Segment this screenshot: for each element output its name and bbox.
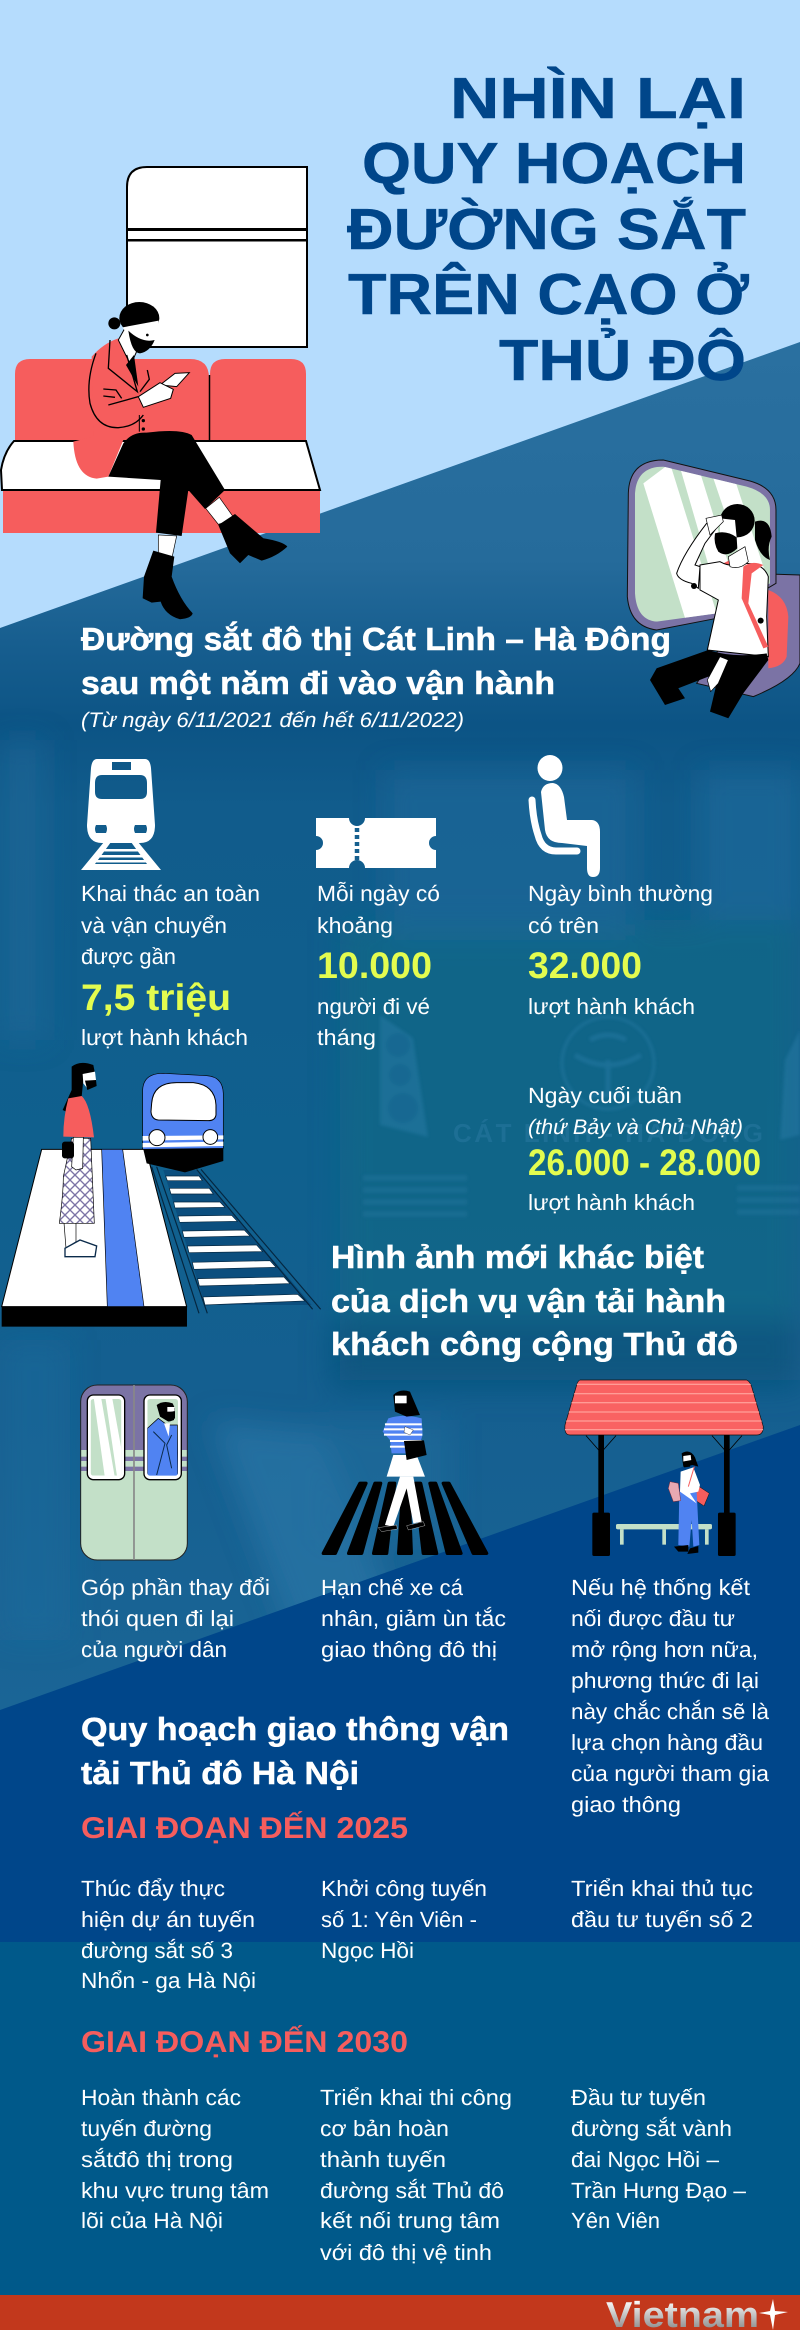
stat: 10.000: 10.000 (317, 945, 432, 986)
text: 2030 item 3 (571, 2085, 747, 2233)
text: network expansion (571, 1575, 770, 1817)
text: 2030 item 2: kết nối trung tâm (320, 2208, 500, 2233)
title (347, 66, 750, 393)
text: 2030 item 3: Trần Hưng Đạo – (571, 2178, 747, 2203)
stat: 32.000 weekdays (528, 881, 713, 1019)
title: TRÊN CẠO Ở (348, 262, 750, 327)
text: 2030 item 2 (320, 2085, 512, 2265)
stat: weekend 26.000 - 28.000: lượt hành khách (528, 1190, 695, 1215)
heading: new image of public transport: của dịch vụ vận tải hành (331, 1283, 726, 1319)
text: network expansion: lựa chọn hàng đầu (571, 1730, 763, 1755)
stat: 7,5 triệu: Khai thác an toàn (81, 881, 260, 906)
text: 2030 item 2: thành tuyến (320, 2147, 446, 2172)
stat: 32.000 weekdays: Ngày bình thường (528, 881, 713, 906)
heading: new image of public transport: Hình ảnh mới khác biệt (331, 1239, 704, 1275)
heading: new image of public transport: khách công cộng Thủ đô (331, 1326, 738, 1362)
title: QUY HOẠCH (362, 131, 746, 196)
text: 2030 item 2: cơ bản hoàn (320, 2116, 449, 2141)
text: network expansion: của người tham gia (571, 1761, 770, 1786)
stat: 10.000: Mỗi ngày có (317, 881, 440, 906)
text: limit private vehicles: nhân, giảm ùn tắc (321, 1606, 506, 1631)
illustration: woman on zebra crossing (323, 1391, 487, 1553)
text: network expansion: nối được đầu tư (571, 1606, 735, 1631)
text: change travel habits: thói quen đi lại (81, 1606, 234, 1631)
stat: 32.000 weekdays: lượt hành khách (528, 994, 695, 1019)
stat: 7,5 triệu: và vận chuyển (81, 913, 227, 938)
illustration: station platform, train and tracks (2, 1063, 321, 1327)
icon: train (81, 759, 161, 870)
text: 2025 item 1: Nhổn - ga Hà Nội (81, 1968, 256, 1993)
text: 2030 item 1: Hoàn thành các (81, 2085, 241, 2110)
heading: Cát Linh – Hà Đông: (Từ ngày 6/11/2021 đến hết 6/11/2022) (81, 709, 464, 732)
stat: 7,5 triệu: lượt hành khách (81, 1025, 248, 1050)
text: 2025 item 3: đầu tư tuyến số 2 (571, 1907, 753, 1932)
text: 2030 item 3: Yên Viên (571, 2208, 660, 2233)
text: 2025 item 2 (321, 1876, 487, 1963)
stat: 7,5 triệu (81, 881, 260, 1050)
heading: new image of public transport (331, 1239, 738, 1362)
heading: Cát Linh – Hà Đông: Đường sắt đô thị Cát Linh – Hà Đông (81, 621, 671, 657)
text: 2030 item 3: đường sắt vành (571, 2116, 732, 2141)
text: network expansion: Nếu hệ thống kết (571, 1575, 750, 1600)
text: 2030 item 2: đường sắt Thủ đô (320, 2178, 504, 2203)
text: network expansion: phương thức đi lại (571, 1668, 759, 1693)
stat: weekend 26.000 - 28.000 (528, 1083, 761, 1215)
text: limit private vehicles: giao thông đô thị (321, 1637, 497, 1662)
text: 2030 item 1: khu vực trung tâm (81, 2178, 269, 2203)
text: 2025 item 1: hiện dự án tuyến (81, 1907, 255, 1932)
heading: Cát Linh – Hà Đông (81, 621, 671, 732)
text: change travel habits: của người dân (81, 1637, 227, 1662)
heading: Hanoi transport planning: tải Thủ đô Hà Nội (81, 1755, 359, 1791)
heading: phase to 2030: GIAI ĐOẠN ĐẾN 2030 (81, 2025, 408, 2059)
photo detail: station sign lettering: CÁT LINH - HÀ ĐÔNG (453, 1118, 763, 1148)
stat: weekend 26.000 - 28.000: 26.000 - 28.000 (528, 1142, 761, 1183)
title: ĐƯỜNG SẮT (347, 197, 746, 262)
stat: 32.000 weekdays: có trên (528, 913, 599, 938)
text: change travel habits (81, 1575, 270, 1662)
text: network expansion: này chắc chắn sẽ là (571, 1699, 770, 1724)
illustration: woman reading phone on seat (73, 302, 287, 619)
illustration: station shelter with waiting woman (563, 1380, 767, 1556)
text: 2030 item 1 (81, 2085, 269, 2233)
illustration: passenger by window with backpack (620, 450, 800, 718)
text: 2025 item 3 (571, 1876, 753, 1932)
text: 2025 item 2: Ngọc Hồi (321, 1938, 414, 1963)
title: THỦ ĐÔ (499, 328, 746, 393)
text: limit private vehicles (321, 1575, 506, 1662)
text: 2030 item 2: với đô thị vệ tinh (320, 2240, 492, 2265)
stat: 32.000 weekdays: 32.000 (528, 945, 642, 986)
text: 2025 item 2: Khởi công tuyến (321, 1876, 487, 1901)
photo detail: traffic light (363, 1015, 800, 1217)
text: 2025 item 3: Triển khai thủ tục (571, 1876, 753, 1901)
text: 2030 item 1: lõi của Hà Nội (81, 2208, 223, 2233)
stat: 10.000 (317, 881, 440, 1050)
heading: phase to 2025: GIAI ĐOẠN ĐẾN 2025 (81, 1811, 408, 1845)
text: 2030 item 1: sắtđô thị trong (81, 2147, 233, 2172)
icon: seated passenger (532, 755, 600, 877)
text: 2030 item 3: đai Ngọc Hồi – (571, 2147, 720, 2172)
text: change travel habits: Góp phần thay đổi (81, 1575, 270, 1600)
illustration: train seat with window (1, 167, 320, 533)
text: 2030 item 2: Triển khai thi công (320, 2085, 512, 2110)
stat: 7,5 triệu: 7,5 triệu (81, 977, 231, 1018)
text: network expansion: mở rộng hơn nữa, (571, 1637, 758, 1662)
heading: Cát Linh – Hà Đông: sau một năm đi vào vận hành (81, 665, 555, 701)
illustration: train doors with passenger (81, 1385, 187, 1560)
stat: 10.000: khoảng (317, 913, 393, 938)
stat: 10.000: tháng (317, 1025, 376, 1050)
heading: Hanoi transport planning: Quy hoạch giao thông vận (81, 1711, 509, 1747)
stat: 10.000: người đi vé (317, 994, 430, 1019)
text: 2030 item 1: tuyến đường (81, 2116, 212, 2141)
text: 2025 item 1: Thúc đẩy thực (81, 1876, 225, 1901)
text: 2025 item 1 (81, 1876, 256, 1993)
text: 2025 item 2: số 1: Yên Viên - (321, 1907, 477, 1932)
icon: ticket (316, 818, 436, 868)
text: limit private vehicles: Hạn chế xe cá (321, 1575, 464, 1600)
stat: weekend 26.000 - 28.000: Ngày cuối tuần (528, 1083, 682, 1108)
stat: 7,5 triệu: được gần (81, 944, 176, 969)
text: network expansion: giao thông (571, 1792, 681, 1817)
text: 2025 item 1: đường sắt số 3 (81, 1938, 233, 1963)
title: NHÌN LẠI (450, 66, 746, 131)
text: 2030 item 3: Đầu tư tuyến (571, 2085, 706, 2110)
stat: weekend 26.000 - 28.000: (thứ Bảy và Chủ Nhật) (528, 1116, 743, 1139)
heading: Hanoi transport planning (81, 1711, 509, 1791)
